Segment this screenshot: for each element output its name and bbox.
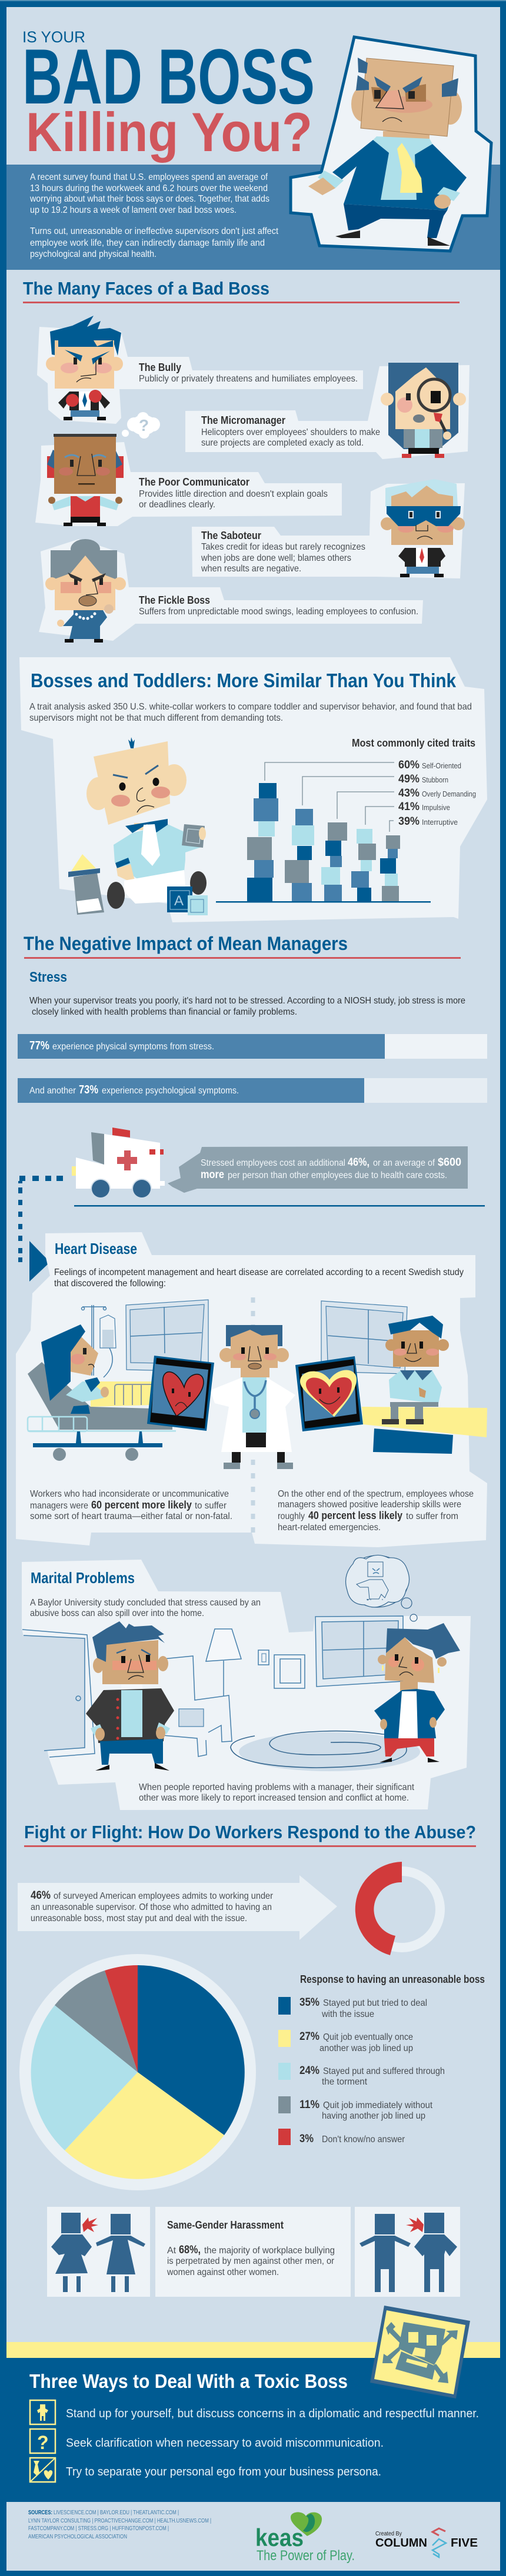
header: title and intro (6, 28, 500, 270)
section: bosses and toddlers (19, 657, 487, 922)
room line art (22, 1616, 420, 1771)
section: fight or flight (18, 1822, 485, 2297)
legend rows: Don't know/no answer (322, 2135, 405, 2145)
x-ray: sad heart (147, 1356, 214, 1431)
bar: 73%: And another (29, 1086, 76, 1096)
legend rows: having another job lined up (322, 2111, 425, 2121)
heading: Bosses and Toddlers: More Similar Than You Think (31, 670, 457, 691)
stress text: When your supervisor treats you poorly, it's hard not to be stressed. According to a NIOSH study, job stress is more (29, 996, 465, 1006)
text block: supervisors might not be that much different from demanding tots. (29, 713, 283, 723)
legend rows: 11% (299, 2099, 319, 2111)
text panel: women against other women. (167, 2267, 279, 2277)
section: negative impact heading (24, 933, 461, 959)
legend rows: Quit job eventually once (323, 2032, 413, 2042)
panel: the bully (37, 316, 363, 424)
dotted connector and arrow (18, 1176, 63, 1282)
stress text: closely linked with health problems than financial or family problems. (32, 1007, 297, 1017)
icon: skull and crossbones sign (370, 2306, 470, 2398)
legend rows: with the issue (321, 2009, 374, 2019)
title (22, 28, 315, 163)
panel: the micromanager: Helicopters over employees' shoulders to make (201, 427, 380, 437)
arrow callout: 46% (18, 1875, 337, 1940)
legend rows (278, 1996, 445, 2145)
callout: cost exhaust cloud: 46%, (348, 1156, 369, 1169)
panel: the fickle boss (39, 539, 423, 643)
panel: the poor communicator: The Poor Communicator (139, 476, 249, 488)
text: inconsiderate managers: some sort of heart trauma—either fatal or non-fatal. (30, 1511, 232, 1521)
legend rows: 24% (299, 2065, 319, 2077)
arrow callout: 46%: an unreasonable supervisor. Of those who admitted to having an (31, 1902, 272, 1912)
intro text: Feelings of incompetent management and heart disease are correlated according to a recent Swedish study (54, 1267, 464, 1277)
bar: 73%: experience psychological symptoms. (102, 1086, 239, 1096)
sources: SOURCES: (28, 2510, 52, 2516)
legend rows: 27% (299, 2030, 319, 2043)
panel: the micromanager (185, 363, 470, 459)
text panel: is perpetrated by men against other men, or (167, 2256, 335, 2266)
dashed divider (251, 1297, 255, 1534)
doctor (210, 1325, 295, 1469)
sources (28, 2510, 211, 2540)
panel: the bully: The Bully (139, 362, 181, 373)
panel: same-gender harassment (47, 2207, 460, 2297)
panel: the poor communicator (35, 412, 342, 526)
panel: the poor communicator: ? (139, 416, 149, 434)
panel: the fickle boss: Suffers from unpredictable mood swings, leading employees to confusion. (139, 607, 418, 617)
callout: cost exhaust cloud: more (201, 1169, 224, 1181)
trait labels: Self-Oriented (422, 761, 461, 770)
text: inconsiderate managers: 60 percent more likely (91, 1499, 192, 1511)
logo: keas: keas (255, 2524, 304, 2551)
intro text: A recent survey found that U.S. employees spend an average of (30, 172, 268, 182)
stacked block towers (216, 783, 431, 903)
tip 1 (30, 2400, 479, 2424)
sources: FASTCOMPANY.COM | STRESS.ORG | HUFFINGTONPOST.COM | (28, 2525, 169, 2532)
heading: Fight or Flight: How Do Workers Respond to the Abuse? (24, 1822, 476, 1842)
bar: 77%: 77% (29, 1039, 49, 1052)
legend (278, 1973, 485, 2145)
trait labels: 41% (398, 801, 420, 813)
heading: The Many Faces of a Bad Boss (23, 278, 269, 299)
closing text (139, 1782, 415, 1803)
men figures (355, 2207, 460, 2297)
intro text: Turns out, unreasonable or ineffective supervisors don't just affect (30, 226, 278, 236)
panel: the saboteur: when results are negative. (201, 564, 301, 574)
text: inconsiderate managers: managers were (30, 1501, 88, 1511)
intro text: worrying about what their boss says or does. Together, that adds (29, 194, 269, 204)
logo: column five: FIVE (451, 2537, 478, 2550)
text panel (155, 2207, 351, 2297)
legend rows: another was job lined up (319, 2043, 413, 2053)
callout: cost exhaust cloud: Stressed employees cost an additional (201, 1158, 345, 1168)
closing text: When people reported having problems with a manager, their significant (139, 1782, 415, 1792)
donut chart: 46% (355, 1862, 440, 1955)
panel: the micromanager: The Micromanager (201, 414, 285, 426)
arrow callout: 46%: of surveyed American employees admits to working under (54, 1891, 274, 1901)
text panel: the majority of workplace bullying (204, 2246, 335, 2256)
bar: 77% (18, 1034, 487, 1059)
intro text: 13 hours during the workweek and 6.2 hours over the weekend (30, 183, 268, 193)
text: positive leadership: 40 percent less likely (308, 1510, 402, 1521)
title: BAD BOSS (22, 34, 315, 121)
thought bubble: boss (346, 1555, 417, 1621)
hospital bed and patient (28, 1305, 176, 1461)
text panel: At (167, 2246, 177, 2256)
trait labels: 39% (398, 815, 420, 828)
panel: the poor communicator: or deadlines clearly. (139, 500, 215, 510)
intro text: A Baylor University study concluded that stress caused by an (30, 1598, 261, 1608)
legend rows: Stayed put but tried to deal (323, 1998, 427, 2008)
section: the many faces of a bad boss (23, 278, 470, 643)
panel: marital problems (22, 1555, 471, 1810)
sources: LYNN TAYLOR CONSULTING | PROACTIVECHANGE.COM | HEALTH.USNEWS.COM | (28, 2518, 211, 2524)
intro text: employee work life, they can indirectly damage family life and (30, 238, 265, 248)
trait labels: Interruptive (422, 818, 458, 827)
title: IS YOUR (22, 28, 85, 46)
legend rows: Quit job immediately without (323, 2100, 433, 2110)
sources: LIVESCIENCE.COM | BAYLOR.EDU | THEATLANTIC.COM | (54, 2510, 179, 2516)
text: positive leadership: heart-related emergencies. (278, 1523, 381, 1533)
right window (321, 1301, 407, 1374)
trait labels: 43% (398, 787, 420, 799)
tip 2 (30, 2429, 384, 2453)
panel: the bully: Publicly or privately threatens and humiliates employees. (139, 374, 358, 384)
logo: column five: Created By (375, 2531, 402, 2537)
callout: cost exhaust cloud: or an average of (373, 1158, 435, 1168)
panel: the saboteur: Takes credit for ideas but rarely recognizes (201, 542, 365, 552)
text block (29, 702, 472, 723)
footer (6, 2502, 500, 2571)
legend rows: the torment (322, 2077, 368, 2087)
healthy man (362, 1316, 487, 1454)
panel: the saboteur: when jobs are done well; blames others (201, 553, 351, 563)
stress text (29, 996, 465, 1017)
intro text (29, 172, 278, 259)
bar: 77%: experience physical symptoms from stress. (52, 1042, 214, 1052)
stressed man (86, 1621, 174, 1771)
legend rows: Stayed put and suffered through (323, 2066, 445, 2076)
trait labels: 60% (398, 759, 420, 771)
pie chart: response (19, 1954, 256, 2190)
panel: the micromanager: sure projects are completed exacly as told. (201, 438, 364, 448)
chart title: Most commonly cited traits (352, 737, 475, 749)
title: Killing You? (26, 101, 312, 163)
panel: heart disease (16, 1232, 487, 1547)
panel: the saboteur: The Saboteur (201, 530, 261, 541)
intro text: abusive boss can also spill over into the home. (30, 1608, 204, 1618)
heading: Marital Problems (31, 1569, 135, 1587)
tip 2: Seek clarification when necessary to avoid miscommunication. (66, 2437, 384, 2450)
text panel: 68%, (179, 2244, 201, 2256)
big boss character (291, 37, 491, 251)
text: inconsiderate managers: Workers who had inconsiderate or uncommunicative (30, 1489, 229, 1499)
text: positive leadership: managers showed positive leadership skills were (278, 1500, 461, 1510)
logo: column five: COLUMN (375, 2537, 427, 2550)
intro text: psychological and physical health. (30, 249, 157, 259)
intro text: that discovered the following: (54, 1279, 166, 1289)
section: three ways to deal with a toxic boss (6, 2306, 500, 2502)
heading: Heart Disease (55, 1240, 137, 1257)
intro text: up to 19.2 hours a week of lament over bad boss woes. (30, 205, 237, 215)
tip 1: Stand up for yourself, but discuss concerns in a diplomatic and respectful manner. (66, 2407, 479, 2420)
tip 3: Try to separate your personal ego from your business persona. (66, 2465, 381, 2478)
legend rows: 3% (299, 2133, 314, 2145)
callout: cost exhaust cloud (168, 1146, 468, 1193)
tip 2: ? (37, 2432, 49, 2453)
intro text (54, 1267, 464, 1289)
text: positive leadership (278, 1489, 474, 1533)
panel: stress (18, 969, 487, 1206)
women figures (47, 2207, 150, 2297)
intro band (6, 165, 500, 270)
sources: AMERICAN PSYCHOLOGICAL ASSOCIATION (28, 2534, 127, 2540)
panel: the saboteur (192, 479, 465, 578)
left window (126, 1300, 208, 1371)
legend rows: 35% (299, 1996, 319, 2009)
closing text: other was more likely to report increased tension and conflict at home. (139, 1793, 409, 1803)
annoyed woman (374, 1623, 460, 1762)
text block: A trait analysis asked 350 U.S. white-collar workers to compare toddler and supervisor behavior, and found that bad (29, 702, 472, 712)
leader lines (265, 762, 394, 832)
callout: cost exhaust cloud: per person than other employees due to health care costs. (228, 1170, 447, 1180)
bar: 73% (18, 1078, 487, 1103)
text: positive leadership: to suffer from (406, 1511, 458, 1521)
trait labels: 49% (398, 773, 420, 785)
text panel: Same-Gender Harassment (167, 2219, 284, 2231)
chart: most commonly cited traits (216, 737, 476, 903)
heading: Three Ways to Deal With a Toxic Boss (29, 2370, 348, 2392)
heading (23, 278, 460, 303)
intro text (30, 1598, 261, 1618)
stress heading: Stress (29, 969, 67, 985)
logo: keas: The Power of Play. (257, 2548, 355, 2564)
bar: 73%: 73% (79, 1083, 98, 1096)
toddler illustration: A (174, 893, 184, 909)
panel: the poor communicator: Provides little direction and doesn't explain goals (139, 489, 328, 499)
panel: the fickle boss: The Fickle Boss (139, 594, 210, 606)
text: inconsiderate managers: to suffer (195, 1501, 227, 1511)
text: positive leadership: On the other end of the spectrum, employees whose (278, 1489, 474, 1499)
text: positive leadership: roughly (278, 1511, 305, 1521)
logo: keas (255, 2512, 355, 2564)
callout: cost exhaust cloud: $600 (438, 1156, 461, 1169)
section: negative impact heading: The Negative Impact of Mean Managers (24, 933, 348, 954)
logo: column five (375, 2528, 478, 2557)
text: inconsiderate managers (30, 1489, 232, 1521)
x-ray: happy heart (295, 1356, 363, 1431)
icon: ambulance (72, 1128, 165, 1199)
toddler illustration (68, 737, 208, 915)
arrow callout: 46%: unreasonable boss, most stay put and deal with the issue. (31, 1913, 247, 1923)
trait labels: Overly Demanding (422, 789, 476, 798)
tip 3 (30, 2458, 381, 2482)
trait labels: Stubborn (422, 775, 448, 784)
arrow callout: 46%: 46% (31, 1889, 51, 1902)
trait labels (398, 759, 476, 828)
trait labels: Impulsive (422, 803, 450, 812)
